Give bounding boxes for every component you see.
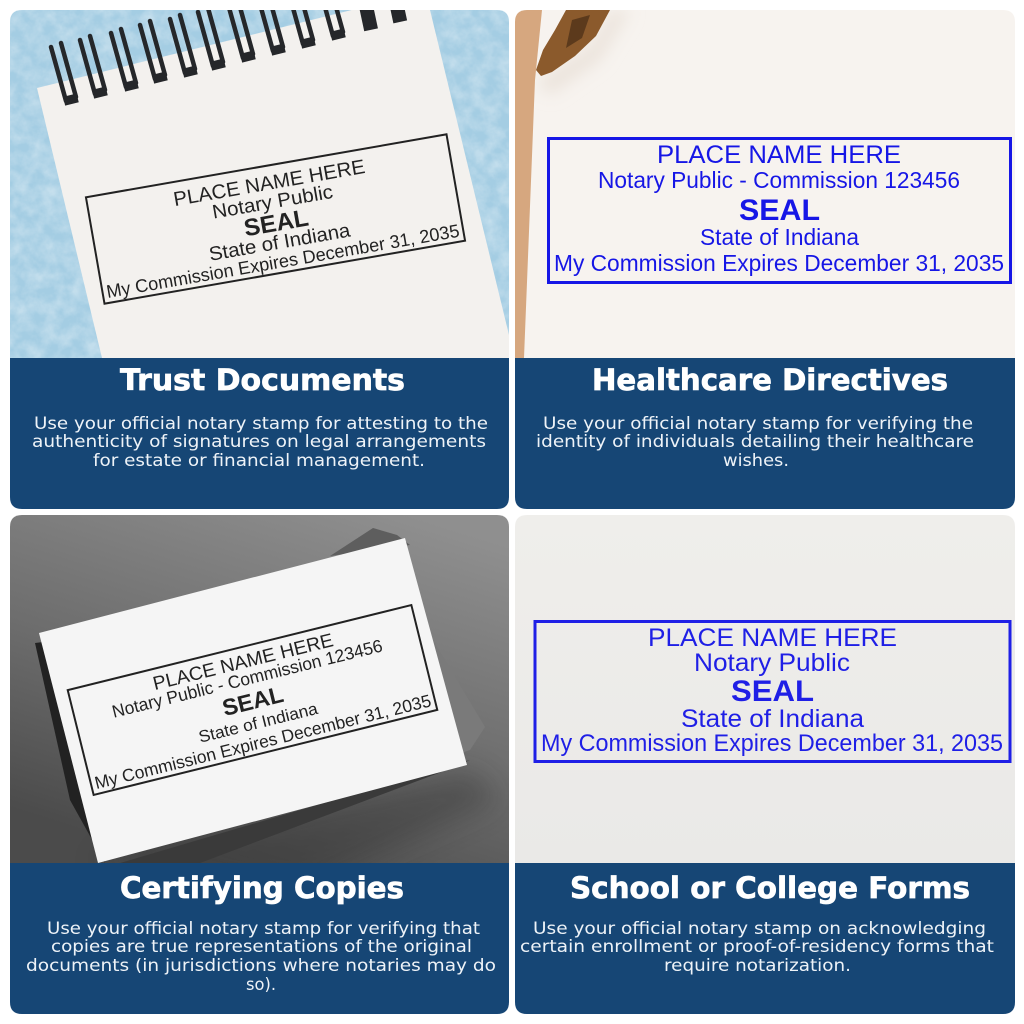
stamp impression: blue notary seal: My Commission Expires December 31, 2035 [554, 250, 1004, 276]
panel: trust documents [10, 0, 509, 509]
caption band [10, 358, 509, 509]
stamp impression: black notary seal [68, 605, 437, 795]
description [520, 919, 995, 975]
caption band [515, 863, 1015, 1014]
description: Use your official notary stamp on acknowledging [533, 919, 986, 938]
stamp impression: black notary seal: PLACE NAME HERE [172, 156, 367, 211]
stamp impression: black notary seal: Notary Public - Commission 123456 [110, 636, 385, 722]
description: authenticity of signatures on legal arrangements [32, 432, 486, 451]
description: documents (in jurisdictions where notaries may do [26, 956, 496, 975]
heading: School or College Forms [570, 871, 970, 905]
description: Use your official notary stamp for attesting to the [34, 414, 488, 433]
stamp impression: blue notary seal: PLACE NAME HERE [657, 141, 901, 169]
photo: paper with wooden stick [515, 10, 1015, 358]
description: so). [246, 975, 276, 994]
heading: Certifying Copies [120, 871, 404, 905]
stamp impression: blue notary seal [535, 622, 1010, 762]
stamp impression: blue notary seal: SEAL [739, 194, 820, 227]
stamp impression: black notary seal: SEAL [220, 681, 286, 721]
stamp impression: blue notary seal: PLACE NAME HERE [648, 624, 897, 652]
stamp impression: blue notary seal: Notary Public - Commission 123456 [598, 167, 960, 193]
panel: school or college forms [515, 515, 1015, 1014]
heading: Trust Documents [120, 363, 405, 397]
description: Use your official notary stamp for verifying the [543, 414, 973, 433]
stamp impression: black notary seal: State of Indiana [197, 699, 320, 747]
stamp impression: blue notary seal [548, 138, 1010, 282]
photo: blank light paper [515, 515, 1015, 863]
stamp impression: black notary seal: PLACE NAME HERE [151, 630, 336, 695]
stamp impression: black notary seal: My Commission Expires December 31, 2035 [105, 220, 461, 302]
stamp impression: blue notary seal: State of Indiana [681, 705, 864, 733]
description [536, 414, 974, 470]
description [32, 414, 488, 470]
stamp impression: blue notary seal: My Commission Expires December 31, 2035 [541, 730, 1003, 757]
description: identity of individuals detailing their healthcare [536, 432, 974, 451]
stamp impression: black notary seal: SEAL [242, 205, 311, 242]
heading: Healthcare Directives [592, 363, 948, 397]
description: for estate or financial management. [93, 451, 425, 470]
description: certain enrollment or proof-of-residency forms that [520, 937, 995, 956]
stamp impression: blue notary seal: SEAL [731, 675, 814, 708]
description: wishes. [723, 451, 789, 470]
description: copies are true representations of the original [51, 937, 472, 956]
stamp impression: black notary seal [86, 134, 465, 304]
photo: stack of business cards on grey surface [10, 515, 509, 890]
description: Use your official notary stamp for verifying that [47, 919, 481, 938]
description [26, 919, 496, 994]
description: require notarization. [664, 956, 851, 975]
photo: spiral notepad on blue surface [10, 0, 509, 358]
stamp impression: black notary seal: Notary Public [211, 181, 335, 224]
stamp impression: blue notary seal: State of Indiana [700, 224, 859, 250]
caption band [10, 863, 509, 1014]
stamp impression: blue notary seal: Notary Public [694, 649, 850, 677]
stamp impression: black notary seal: State of Indiana [207, 219, 352, 266]
stamp impression: black notary seal: My Commission Expires December 31, 2035 [92, 690, 433, 793]
panel: healthcare directives [515, 10, 1015, 509]
panel: certifying copies [10, 515, 509, 1014]
caption band [515, 358, 1015, 509]
